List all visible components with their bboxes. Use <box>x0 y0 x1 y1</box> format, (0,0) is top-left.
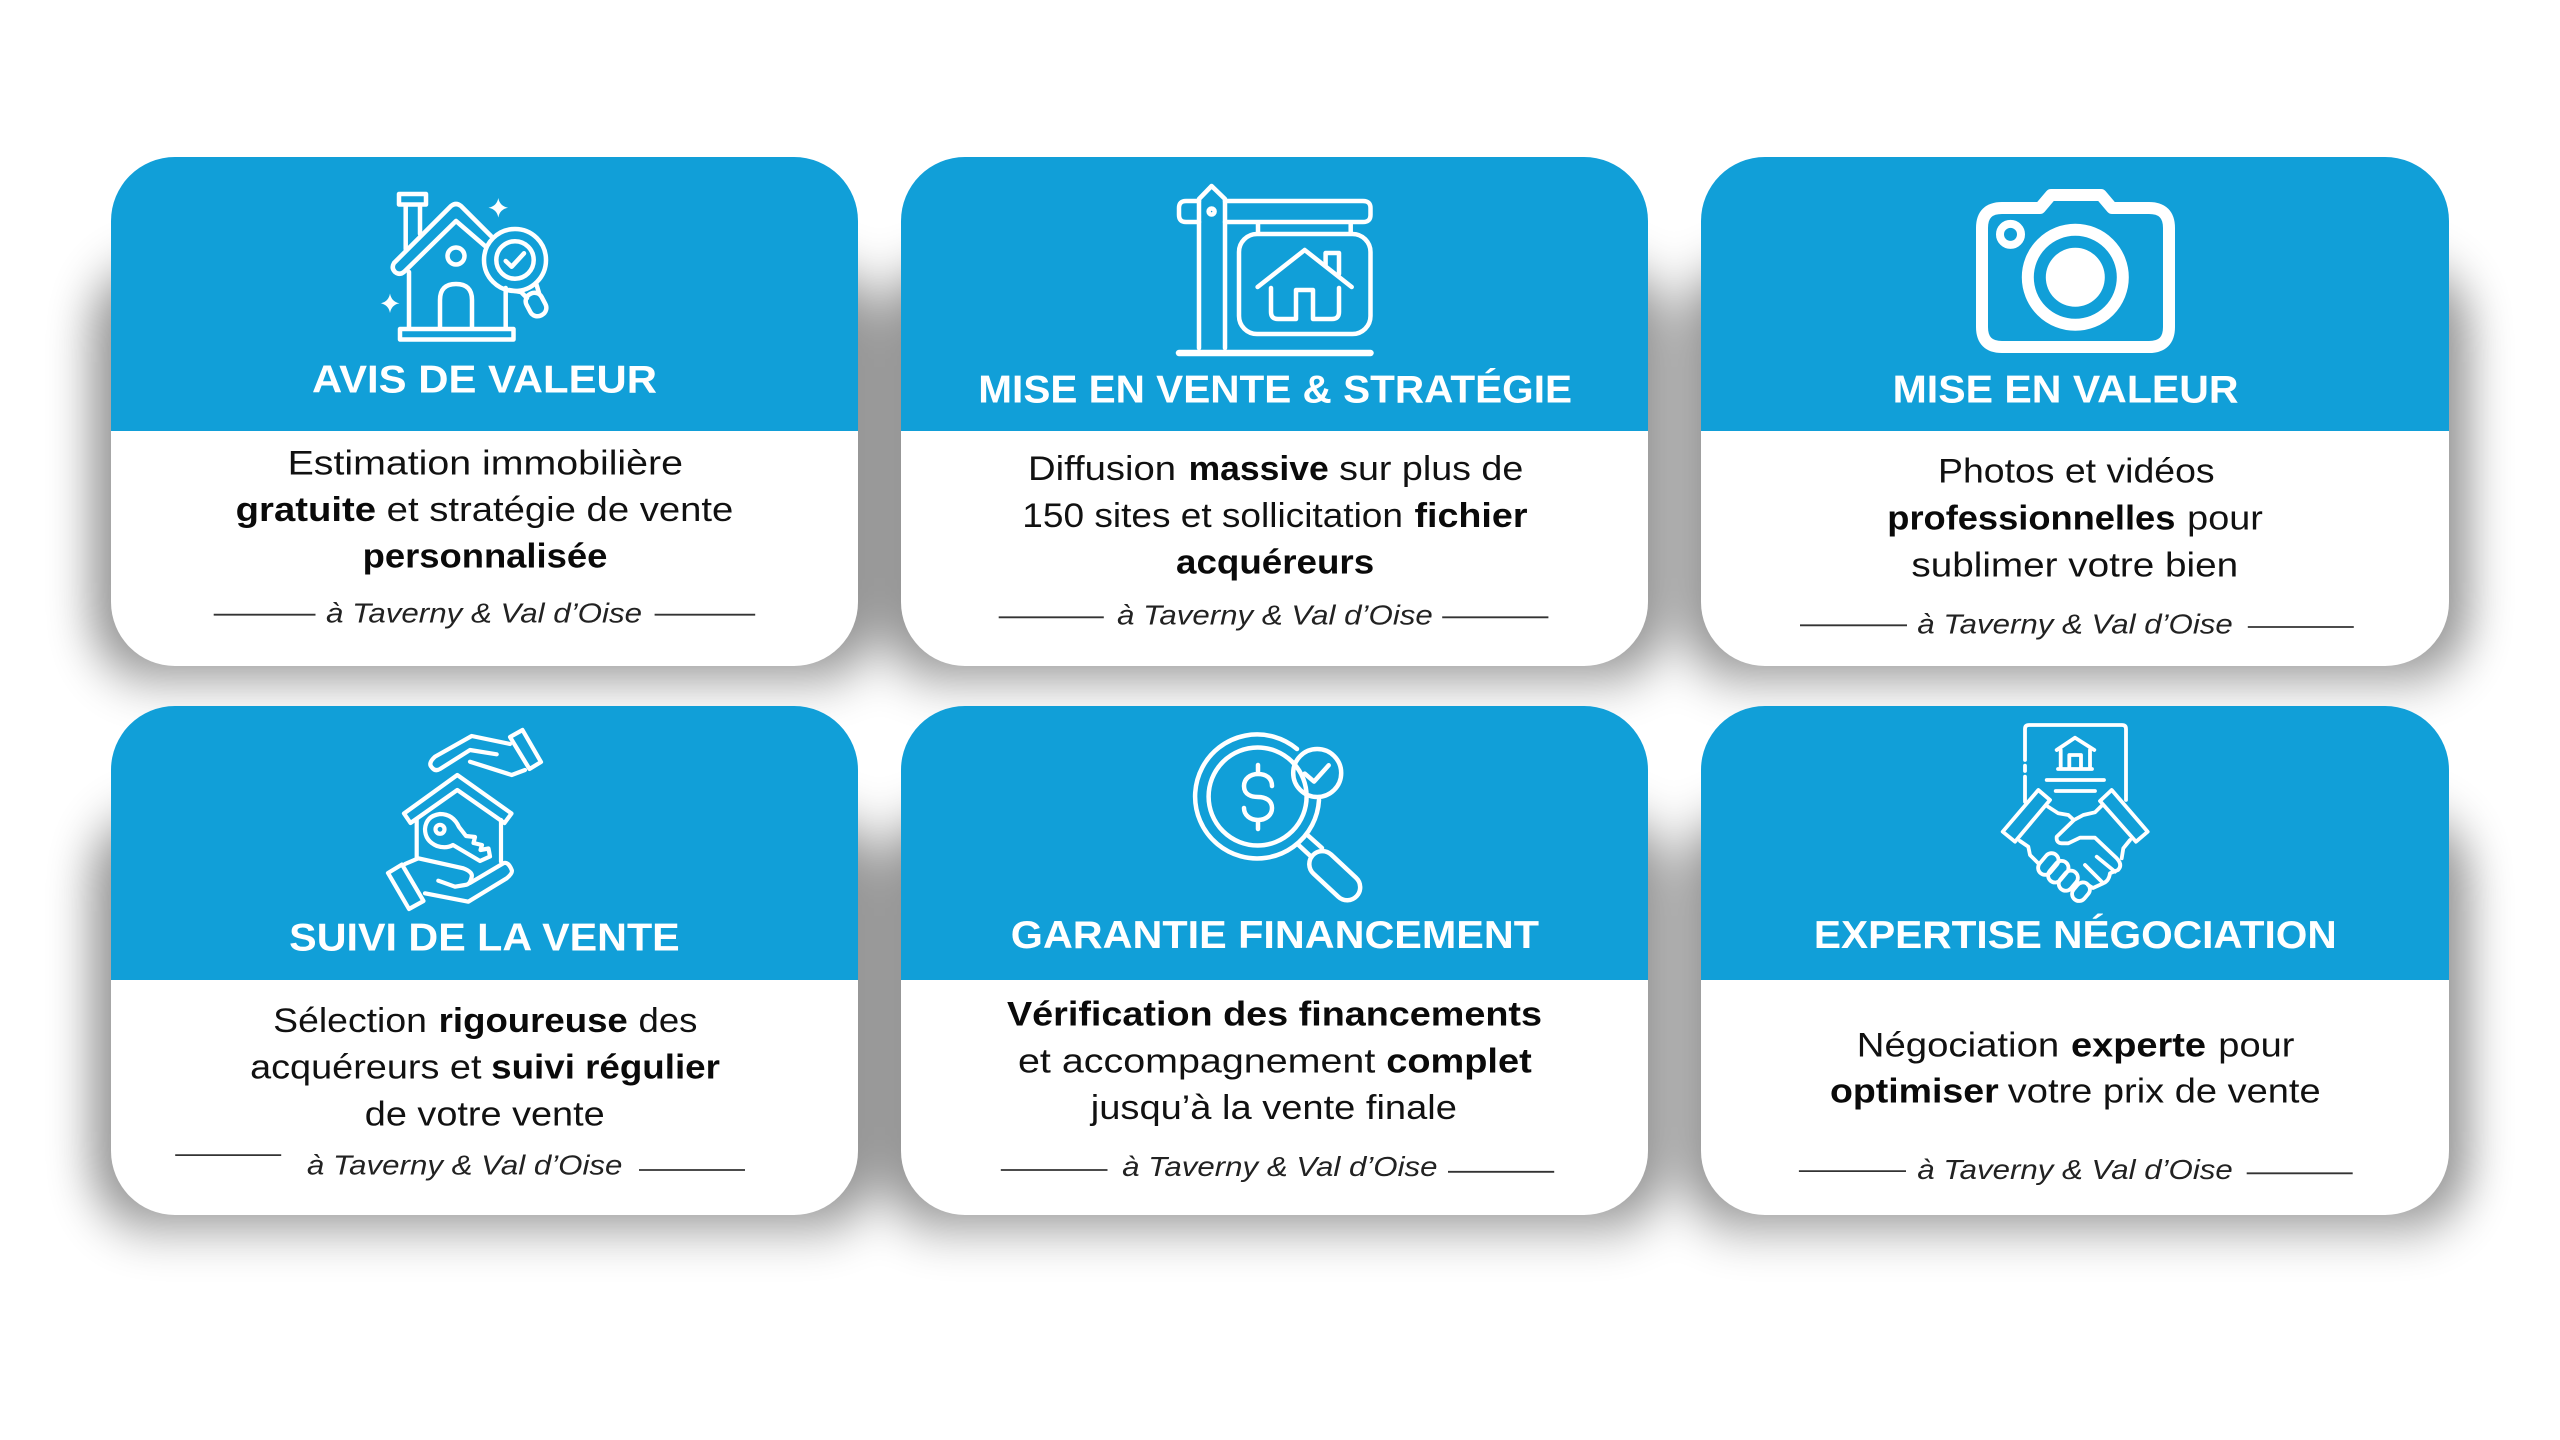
panel: mise en valeur <box>1701 157 2449 666</box>
description: optimiser <box>1830 1073 1999 1111</box>
tagline <box>175 1150 745 1181</box>
description: experte <box>2071 1026 2206 1064</box>
description: acquéreurs <box>1176 544 1374 582</box>
panel: suivi de la vente <box>111 706 858 1215</box>
description: fichier <box>1414 497 1528 535</box>
description: pour <box>2218 1026 2294 1064</box>
description <box>1830 1026 2321 1111</box>
description: acquéreurs et <box>250 1048 482 1086</box>
description: professionnelles <box>1887 499 2175 537</box>
panel: avis de valeur <box>111 157 858 666</box>
panel: garantie financement <box>901 706 1648 1215</box>
tagline: à Taverny & Val d’Oise <box>307 1150 622 1181</box>
description: et accompagnement <box>1018 1042 1376 1080</box>
tagline: à Taverny & Val d’Oise <box>1917 609 2233 640</box>
heading: suivi de la vente: SUIVI DE LA VENTE <box>289 916 680 959</box>
description: Estimation immobilière <box>288 445 683 483</box>
description <box>1887 453 2263 584</box>
description: complet <box>1386 1042 1532 1080</box>
description <box>1022 450 1528 582</box>
icon: house with key held by hands <box>388 730 541 909</box>
description: pour <box>2187 499 2263 537</box>
heading: mise en vente et stratégie: MISE EN VENTE & STRATÉGIE <box>978 368 1572 412</box>
heading: expertise négociation: EXPERTISE NÉGOCIATION <box>1814 913 2337 957</box>
description: 150 sites et sollicitation <box>1022 497 1403 535</box>
description: et stratégie de vente <box>387 491 733 529</box>
description: Photos et vidéos <box>1938 453 2215 491</box>
icon: house with magnifier <box>380 194 549 340</box>
tagline: à Taverny & Val d’Oise <box>1122 1151 1438 1182</box>
description: sublimer votre bien <box>1911 546 2238 584</box>
panel: expertise négociation <box>1701 706 2449 1215</box>
description: personnalisée <box>363 538 607 576</box>
description: Négociation <box>1857 1026 2059 1064</box>
icon: magnifier with dollar <box>1195 734 1366 906</box>
icon: real estate sign <box>1179 186 1370 353</box>
description <box>236 445 733 576</box>
description <box>250 1002 720 1133</box>
tagline: à Taverny & Val d’Oise <box>1917 1154 2233 1185</box>
description: Sélection <box>273 1002 427 1040</box>
heading: mise en valeur: MISE EN VALEUR <box>1893 369 2239 412</box>
tagline: à Taverny & Val d’Oise <box>1117 600 1433 630</box>
description: Diffusion <box>1028 450 1176 488</box>
description: massive <box>1189 450 1329 488</box>
card drop shadows <box>91 267 2469 1227</box>
description: votre prix de vente <box>2008 1073 2321 1111</box>
panel: mise en vente et stratégie <box>901 157 1648 666</box>
description: gratuite <box>236 491 376 529</box>
description <box>1007 995 1542 1127</box>
description: sur plus de <box>1339 450 1523 488</box>
heading: garantie financement: GARANTIE FINANCEMENT <box>1011 914 1539 957</box>
description: de votre vente <box>365 1095 605 1133</box>
tagline: à Taverny & Val d’Oise <box>326 598 642 629</box>
icon: handshake with document <box>2003 725 2148 904</box>
description: rigoureuse <box>439 1002 628 1040</box>
icon: camera <box>1982 195 2169 347</box>
description: des <box>638 1002 697 1040</box>
description: jusqu’à la vente finale <box>1090 1089 1457 1127</box>
description: Vérification des financements <box>1007 995 1542 1033</box>
description: suivi régulier <box>491 1048 720 1086</box>
heading: avis de valeur: AVIS DE VALEUR <box>312 358 657 402</box>
